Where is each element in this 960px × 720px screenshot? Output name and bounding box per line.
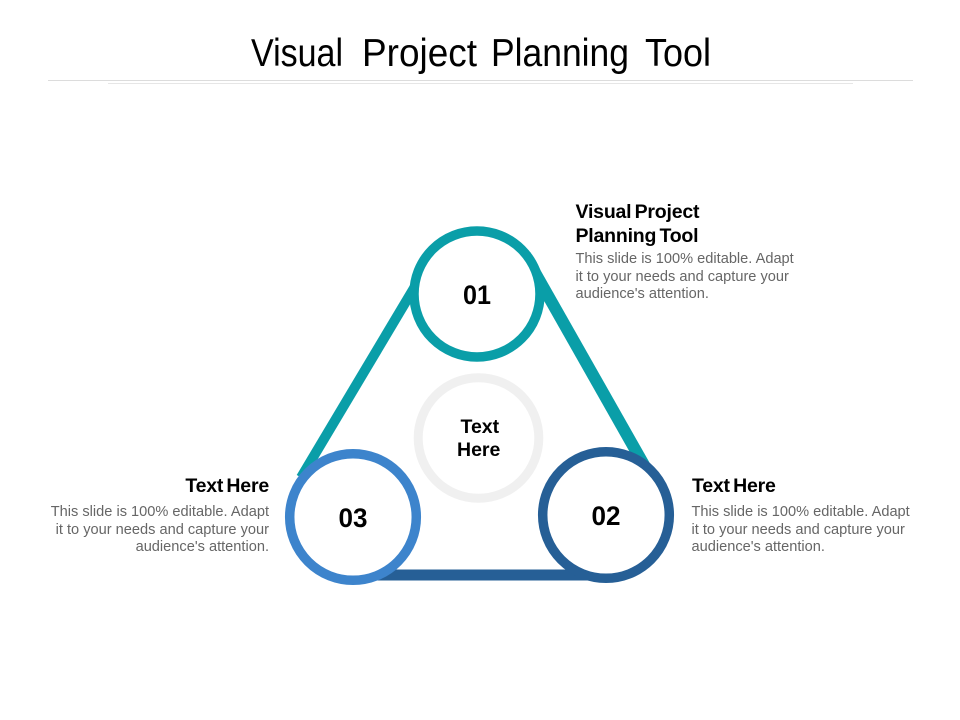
title: Tool: [645, 32, 711, 75]
step 03 circle: [290, 454, 416, 580]
text block: Visual Project Planning Tool: This slide is 100% editable. Adapt: [576, 251, 794, 267]
center circle: [418, 378, 539, 498]
text block: left Text Here: [51, 475, 269, 555]
connector: bottom blue side: [370, 570, 595, 580]
text block: right Text Here: audience's attention.: [692, 539, 825, 555]
title: Planning: [491, 32, 629, 75]
text block: Visual Project Planning Tool: audience's attention.: [576, 286, 709, 302]
step 01 circle: [414, 231, 540, 357]
step 02 circle: [543, 452, 669, 578]
text block: left Text Here: it to your needs and capture your: [56, 522, 269, 538]
text block: right Text Here: Text Here: [692, 475, 776, 497]
text block: left Text Here: Text Here: [185, 475, 269, 497]
title: Project: [362, 32, 477, 75]
title: [251, 32, 711, 75]
text block: left Text Here: This slide is 100% editable. Adapt: [51, 504, 269, 520]
connector: left teal side: [301, 278, 420, 478]
center circle: Text: [460, 416, 500, 438]
text block: right Text Here: it to your needs and capture your: [692, 522, 905, 538]
center circle: Here: [457, 439, 501, 461]
step 03 circle: 03: [338, 503, 368, 533]
step 02 circle: 02: [592, 501, 620, 531]
text block: Visual Project Planning Tool: [576, 201, 794, 302]
step 01 circle: 01: [463, 280, 491, 310]
text block: left Text Here: audience's attention.: [136, 539, 269, 555]
text block: Visual Project Planning Tool: Planning Tool: [576, 225, 698, 247]
connector: right teal side: [525, 255, 650, 476]
text block: Visual Project Planning Tool: Visual Project: [576, 201, 700, 223]
title: Visual: [251, 32, 343, 75]
triangle diagram: [290, 231, 669, 580]
text block: right Text Here: This slide is 100% editable. Adapt: [692, 504, 910, 520]
text block: Visual Project Planning Tool: it to your needs and capture your: [576, 269, 789, 285]
text block: right Text Here: [692, 475, 910, 555]
